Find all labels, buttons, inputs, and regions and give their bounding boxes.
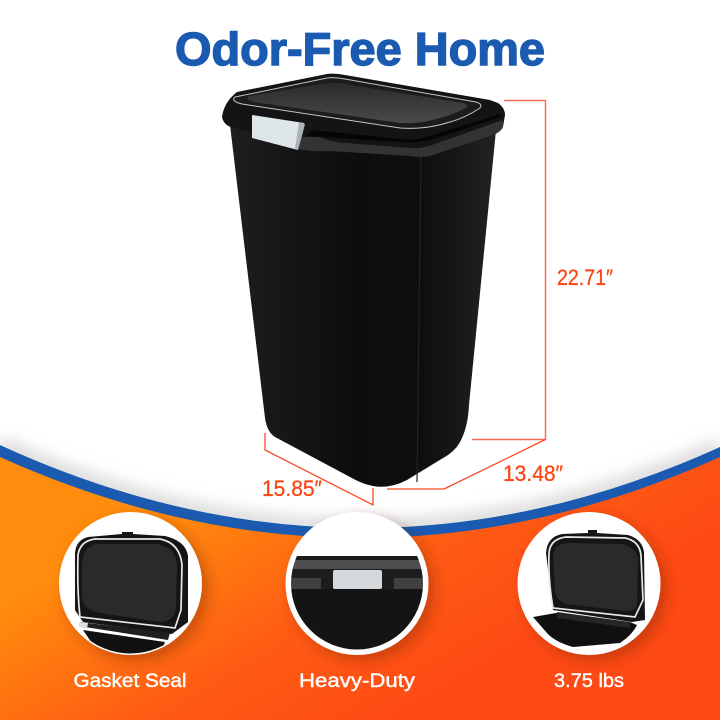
can rim and lid silhouette	[222, 74, 505, 157]
white upper panel	[0, 0, 720, 528]
lid top gasket	[234, 78, 481, 128]
base rim highlight	[298, 120, 503, 157]
caption: gasket seal: Gasket Seal	[74, 671, 186, 692]
curve shadow	[0, 445, 720, 528]
label: width: 15.85″	[262, 476, 322, 501]
can body	[230, 125, 496, 487]
caption: heavy-duty: Heavy-Duty	[299, 671, 416, 692]
height dimension line	[472, 100, 546, 440]
blue curved band	[0, 440, 720, 538]
caption: weight: 3.75 lbs	[554, 671, 624, 692]
title: Odor-Free Home	[175, 23, 545, 75]
detail circle: gasket seal	[59, 512, 202, 655]
background: orange lower panel	[0, 430, 720, 720]
latch	[252, 115, 304, 150]
detail circle: 3.75 lbs open lid	[518, 512, 660, 655]
label: depth: 13.48″	[503, 461, 563, 486]
detail circle: heavy-duty latch	[286, 512, 428, 655]
width dimension line	[265, 433, 373, 505]
label: height: 22.71″	[557, 265, 613, 290]
depth dimension line	[387, 440, 546, 489]
lid top panel	[247, 83, 467, 123]
product: trash can	[222, 74, 505, 487]
